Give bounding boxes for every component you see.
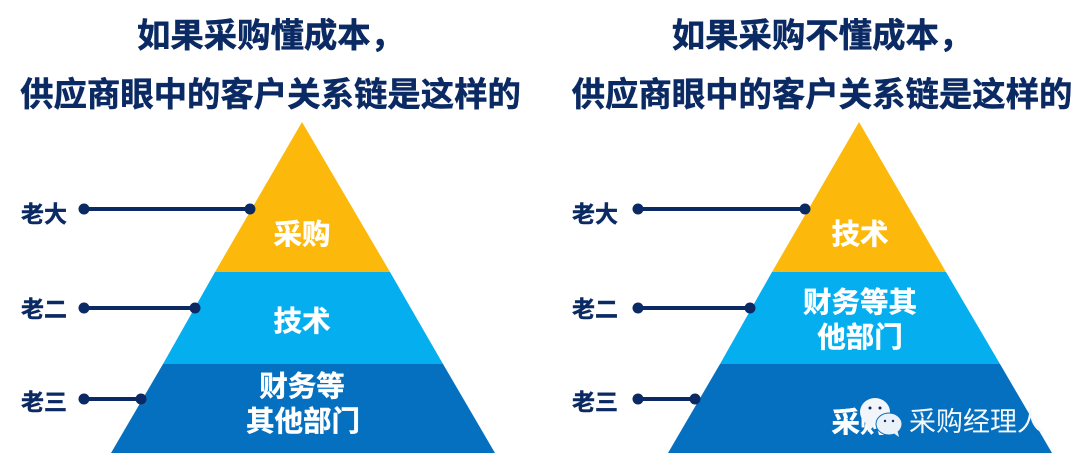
- right title: [572, 18, 1072, 114]
- left tier 1: purchasing: [215, 122, 390, 272]
- right label 老二: 老二: [572, 296, 618, 322]
- right title: 如果采购不懂成本，: [672, 18, 972, 55]
- left label 老二: [21, 296, 200, 322]
- right label 老三: 老三: [572, 389, 618, 415]
- right tier 2: finance and other departments: [720, 272, 1000, 364]
- left label 老三: 老三: [21, 389, 67, 415]
- left rank labels: [21, 201, 256, 415]
- right label 老三: [572, 389, 700, 415]
- watermark: [860, 398, 1044, 437]
- left title: 如果采购懂成本，: [137, 18, 404, 55]
- left label 老三: [21, 389, 146, 415]
- left label 老大: [21, 201, 256, 227]
- left tier 2: technology: [163, 272, 443, 364]
- watermark text: 采购经理人: [909, 407, 1044, 437]
- left label 老二: 老二: [21, 296, 67, 322]
- right tier 1: technology: [772, 122, 946, 272]
- right label 老大: 老大: [572, 201, 618, 227]
- right tier 2: finance and other departments: 财务等其: [803, 287, 917, 319]
- right label 老大: [572, 201, 810, 227]
- left tier 3: finance and other departments: [111, 364, 495, 453]
- right tier 1: technology: 技术: [831, 219, 889, 251]
- right tier 3: purchasing: 采购: [831, 407, 889, 439]
- right tier 3: purchasing: [668, 364, 1052, 453]
- left tier 2: technology: 技术: [273, 306, 331, 338]
- left title: [20, 18, 521, 114]
- icon: chat bubbles: [860, 398, 902, 437]
- left tier 3: finance and other departments: 财务等: [259, 371, 345, 403]
- left tier 1: purchasing: 采购: [273, 219, 331, 251]
- left pyramid: [111, 122, 495, 453]
- right label 老二: [572, 296, 756, 322]
- left label 老大: 老大: [21, 201, 67, 227]
- right tier 2: finance and other departments: 他部门: [817, 322, 903, 354]
- right pyramid: [668, 122, 1052, 453]
- right title: 供应商眼中的客户关系链是这样的: [572, 77, 1072, 114]
- left tier 3: finance and other departments: 其他部门: [246, 406, 360, 438]
- right rank labels: [572, 201, 810, 415]
- left title: 供应商眼中的客户关系链是这样的: [20, 77, 521, 114]
